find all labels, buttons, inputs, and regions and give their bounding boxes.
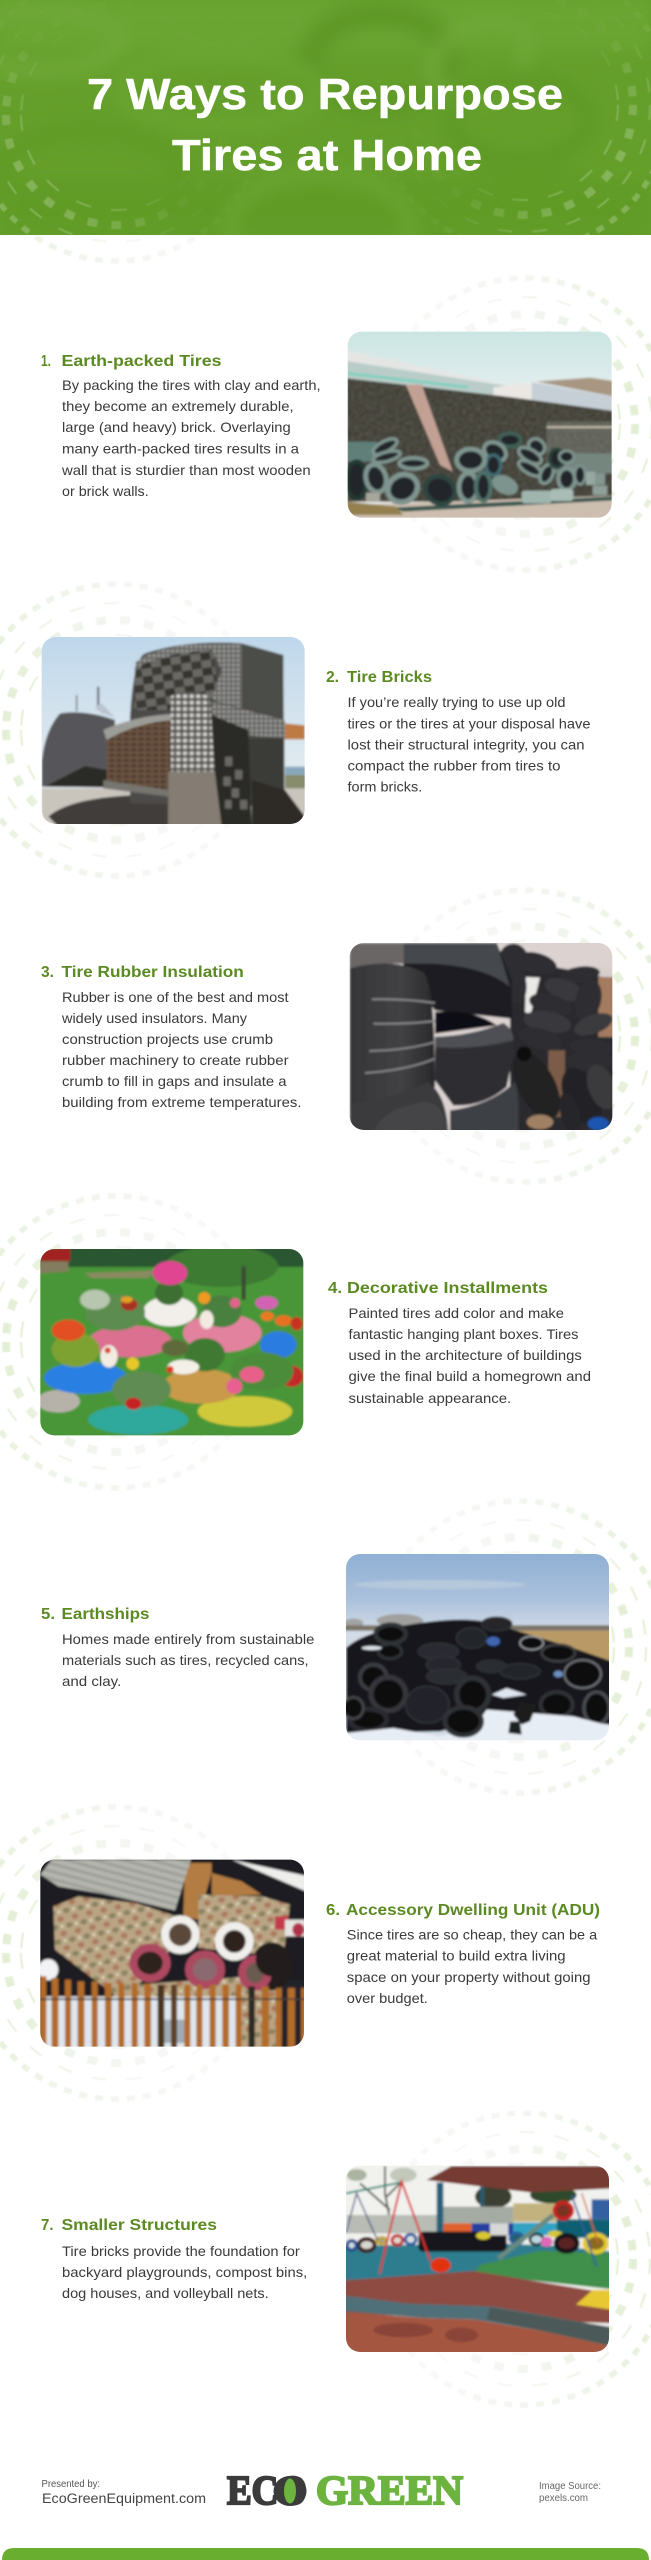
heading: earth-packed tires: Earth-packed Tires — [62, 353, 222, 370]
body text: accessory dwelling unit: great material to build extra living — [347, 1948, 566, 1964]
body text: earth-packed tires: wall that is sturdier than most wooden — [61, 462, 311, 478]
photo: colorful painted tire planters — [40, 1249, 304, 1436]
body text: tire rubber insulation: construction projects use crumb — [62, 1031, 273, 1047]
bottom green bar — [2, 2548, 649, 2560]
heading: tire bricks: 2. — [326, 669, 339, 686]
decorative ring under header — [0, 0, 262, 261]
body text: tire rubber insulation: building from extreme temperatures. — [62, 1094, 302, 1110]
website address: EcoGreenEquipment.com — [42, 2491, 206, 2506]
photo: playground with painted tires — [346, 2166, 609, 2352]
heading: tire bricks: Tire Bricks — [347, 669, 432, 686]
body text: tire rubber insulation: crumb to fill in gaps and insulate a — [62, 1073, 287, 1089]
image source credit: Image Source: — [539, 2481, 601, 2492]
panel: item 1 text — [41, 353, 321, 499]
heading: tire rubber insulation: Tire Rubber Insulation — [62, 964, 244, 981]
heading: accessory dwelling unit: 6. — [326, 1902, 340, 1919]
decorative ring: item 3 — [379, 890, 651, 1182]
panel: item 6 text — [326, 1902, 600, 2006]
logo: eco green: GREEN — [316, 2467, 463, 2513]
body text: smaller structures: Tire bricks provide the foundation for — [62, 2243, 300, 2259]
decorative ring: item 2 — [0, 584, 262, 876]
heading: tire rubber insulation: 3. — [41, 964, 54, 981]
photo: earthship tower built from tires and bottles — [42, 637, 305, 824]
body text: smaller structures — [62, 2243, 307, 2301]
photo: large pile of tires on snow — [346, 1554, 609, 1740]
body text: accessory dwelling unit: Since tires are so cheap, they can be a — [347, 1927, 597, 1943]
body text: tire bricks: tires or the tires at your disposal have — [348, 715, 591, 731]
body text: tire rubber insulation: rubber machinery to create rubber — [62, 1052, 289, 1068]
body text: tire bricks: compact the rubber from tires to — [348, 758, 561, 774]
decorative ring: item 4 — [0, 1196, 262, 1488]
body text: earthships — [62, 1631, 315, 1689]
decorative ring: item 5 — [373, 1501, 651, 1793]
body text: tire bricks: lost their structural integrity, you can — [348, 736, 584, 752]
decorative ring: item 6 — [0, 1807, 262, 2099]
body text: decorative installments: used in the architecture of buildings — [348, 1347, 582, 1363]
body text: earth-packed tires: they become an extremely durable, — [62, 398, 294, 414]
photo: close-up stacks of black tires — [350, 943, 612, 1130]
decorative ring: item 7 — [377, 2113, 651, 2405]
image source credit — [539, 2481, 601, 2504]
logo: eco green — [227, 2467, 463, 2513]
body text: decorative installments — [348, 1305, 591, 1406]
body text: accessory dwelling unit: space on your property without going — [347, 1969, 590, 1985]
panel: footer credits — [42, 2467, 601, 2513]
body text: earth-packed tires: By packing the tires with clay and earth, — [62, 377, 321, 393]
body text: tire bricks: form bricks. — [348, 778, 422, 794]
body text: decorative installments: sustainable appearance. — [348, 1390, 511, 1406]
body text: tire bricks — [348, 694, 591, 794]
title — [87, 70, 563, 180]
body text: earth-packed tires: large (and heavy) brick. Overlaying — [62, 419, 291, 435]
photo: tires hung on patterned wall behind fence — [40, 1860, 304, 2047]
panel: item 7 text — [41, 2217, 307, 2301]
heading: decorative installments: Decorative Installments — [347, 1280, 548, 1297]
body text: earth-packed tires — [61, 377, 321, 499]
body text: tire bricks: If you’re really trying to use up old — [348, 694, 566, 710]
panel: item 5 text — [41, 1606, 315, 1689]
panel: item 2 text — [326, 669, 591, 794]
body text: decorative installments: Painted tires add color and make — [348, 1305, 564, 1321]
body text: smaller structures: dog houses, and volleyball nets. — [62, 2285, 269, 2301]
decorative ring: item 1 — [379, 278, 651, 570]
body text: accessory dwelling unit: over budget. — [347, 1990, 428, 2006]
body text: earth-packed tires: or brick walls. — [62, 483, 149, 499]
title: Tires at Home — [172, 131, 482, 180]
panel: green header banner — [0, 0, 651, 235]
heading: earthships: Earthships — [62, 1606, 150, 1623]
heading: smaller structures: Smaller Structures — [62, 2217, 217, 2234]
body text: earthships: and clay. — [62, 1673, 121, 1689]
body text: decorative installments: give the final build a homegrown and — [348, 1368, 591, 1384]
title: 7 Ways to Repurpose — [87, 70, 563, 119]
panel: item 3 text — [41, 964, 302, 1110]
heading: earth-packed tires: 1. — [41, 353, 51, 370]
logo: eco green: ECO — [227, 2467, 307, 2513]
body text: accessory dwelling unit — [347, 1927, 597, 2006]
heading: accessory dwelling unit: Accessory Dwelling Unit (ADU) — [346, 1902, 600, 1919]
body text: earthships: Homes made entirely from sustainable — [62, 1631, 315, 1647]
image source credit: pexels.com — [539, 2493, 588, 2504]
panel: item 4 text — [328, 1280, 591, 1406]
presented by label: Presented by: — [42, 2479, 100, 2490]
body text: earthships: materials such as tires, recycled cans, — [62, 1652, 309, 1668]
body text: earth-packed tires: many earth-packed tires results in a — [62, 440, 299, 456]
body text: decorative installments: fantastic hanging plant boxes. Tires — [348, 1326, 578, 1342]
heading: smaller structures: 7. — [41, 2217, 54, 2234]
body text: tire rubber insulation: Rubber is one of the best and most — [62, 989, 289, 1005]
body text: tire rubber insulation: widely used insulators. Many — [61, 1010, 247, 1026]
photo: tires piled against a wall — [348, 332, 612, 518]
body text: smaller structures: backyard playgrounds, compost bins, — [62, 2264, 307, 2280]
body text: tire rubber insulation — [61, 989, 302, 1110]
heading: decorative installments: 4. — [328, 1280, 342, 1297]
heading: earthships: 5. — [41, 1606, 55, 1623]
